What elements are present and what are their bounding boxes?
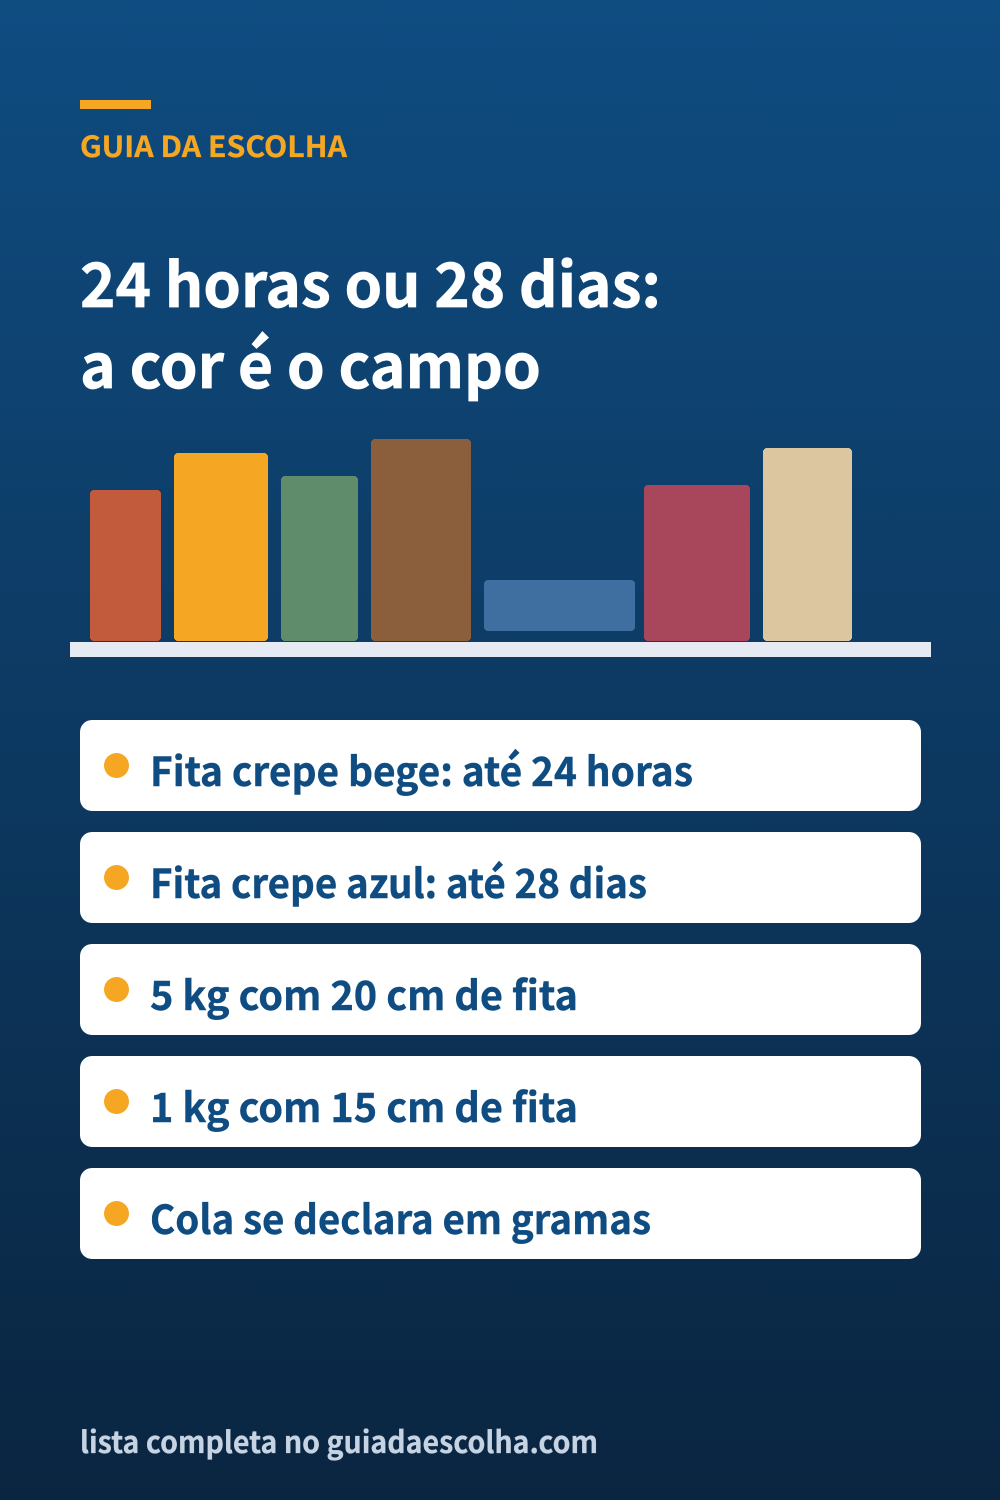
card: fita azul (80, 832, 921, 923)
yellow bar (174, 453, 268, 641)
card: 5 kg (80, 944, 921, 1035)
shelf illustration with tape rolls and products (70, 439, 931, 657)
card: fita azul: Fita crepe azul: até 28 dias (150, 852, 647, 910)
brown bar (371, 439, 471, 641)
footer: lista completa no guiadaescolha.com (80, 1418, 598, 1462)
title: a cor é o campo (80, 317, 541, 406)
red bar (90, 490, 161, 641)
card: 1 kg: 1 kg com 15 cm de fita (150, 1076, 578, 1134)
title: 24 horas ou 28 dias: (80, 236, 661, 325)
blue block (484, 580, 635, 631)
accent bar (80, 100, 151, 109)
card: fita bege (80, 720, 921, 811)
card: 5 kg: 5 kg com 20 cm de fita (150, 964, 578, 1022)
title (80, 236, 661, 406)
list of facts (80, 720, 921, 1259)
card: fita bege: Fita crepe bege: até 24 horas (150, 740, 693, 798)
maroon bar (644, 485, 750, 641)
card: cola: Cola se declara em gramas (150, 1188, 651, 1246)
card: cola (80, 1168, 921, 1259)
shelf (70, 642, 931, 657)
brand label: GUIA DA ESCOLHA (80, 124, 347, 166)
green bar (281, 476, 358, 641)
card: 1 kg (80, 1056, 921, 1147)
beige bar (763, 448, 852, 641)
